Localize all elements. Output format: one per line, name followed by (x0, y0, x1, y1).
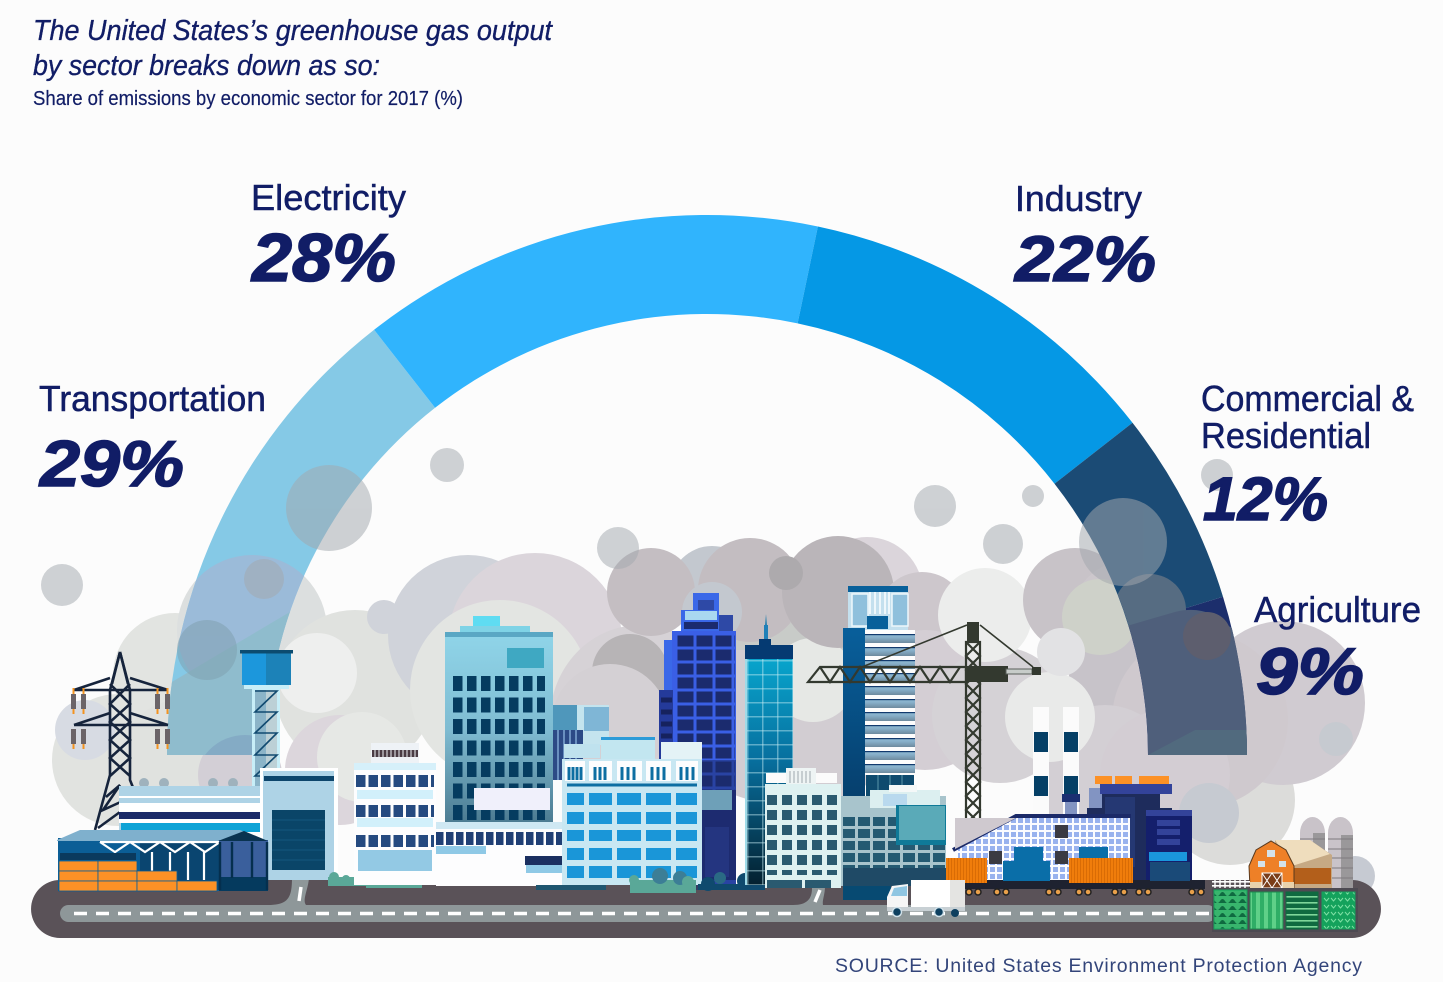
label: Commercial and Residential 12%: 12% (1203, 465, 1328, 533)
title: The United States’s greenhouse gas output (33, 15, 554, 47)
arc segment: Agriculture 9% (1128, 597, 1247, 755)
farm fields (1212, 888, 1358, 932)
front warehouse with orange crates (57, 830, 268, 891)
blue skyscraper (659, 593, 736, 890)
label: Industry 22%: 22% (1014, 223, 1156, 295)
low pale building (765, 768, 841, 888)
road (31, 878, 1381, 938)
background glass block (553, 705, 609, 780)
arc segment: Electricity 28% (374, 215, 818, 408)
title: by sector breaks down as so: (33, 50, 380, 82)
source note: SOURCE: United States Environment Protection Agency (835, 955, 1362, 977)
label: Transportation 29%: Transportation (39, 378, 266, 419)
title (33, 15, 554, 82)
label: Electricity 28%: Electricity (251, 177, 406, 218)
label: Commercial and Residential 12%: Commercial & (1201, 378, 1414, 419)
label: Industry 22%: Industry (1015, 178, 1142, 219)
electricity pylon (71, 652, 170, 830)
mid-rise blue office (562, 737, 702, 885)
label: Agriculture 9% (1254, 589, 1421, 708)
label: Industry 22% (1014, 178, 1156, 295)
skyscraper with stripes (843, 586, 915, 826)
freight train with containers and hoppers (946, 847, 1205, 895)
warehouse block with roller door (260, 768, 338, 880)
label: Agriculture 9%: Agriculture (1254, 589, 1421, 630)
glass low-rise with teal sign (841, 785, 948, 900)
label: Transportation 29% (38, 378, 266, 500)
label: Electricity 28% (250, 177, 406, 296)
subtitle: Share of emissions by economic sector for 2017 (%) (33, 88, 463, 110)
farm fence (1212, 880, 1250, 888)
white office block (354, 743, 436, 885)
bushes centre (629, 868, 765, 893)
smoke veil over the arch (167, 555, 1247, 755)
power plant building (953, 776, 1192, 883)
smoke clouds behind the city (52, 536, 1375, 896)
label: Commercial and Residential 12% (1201, 378, 1414, 533)
factory chimneys (1033, 707, 1080, 817)
drifting smoke puffs (41, 448, 1233, 680)
arc segment: Commercial and Residential 12% (1054, 423, 1223, 626)
bushes left (328, 867, 433, 888)
arc segment: Transportation 29% (167, 330, 435, 755)
long factory (119, 778, 262, 832)
tall office tower (445, 616, 553, 822)
teal tower (745, 614, 793, 885)
arc segment: Industry 22% (798, 226, 1132, 484)
label: Transportation 29%: 29% (38, 427, 184, 500)
water tower (240, 650, 293, 787)
label: Electricity 28%: 28% (250, 220, 396, 296)
tower crane (808, 622, 1041, 852)
label: Commercial and Residential 12%: Residential (1201, 415, 1371, 456)
farm barn (1249, 840, 1332, 889)
arch chart: share of emissions by sector (167, 215, 1247, 755)
label: Agriculture 9%: 9% (1256, 634, 1364, 708)
delivery truck (887, 880, 965, 917)
low wing (436, 822, 606, 890)
farm silos (1300, 817, 1353, 889)
